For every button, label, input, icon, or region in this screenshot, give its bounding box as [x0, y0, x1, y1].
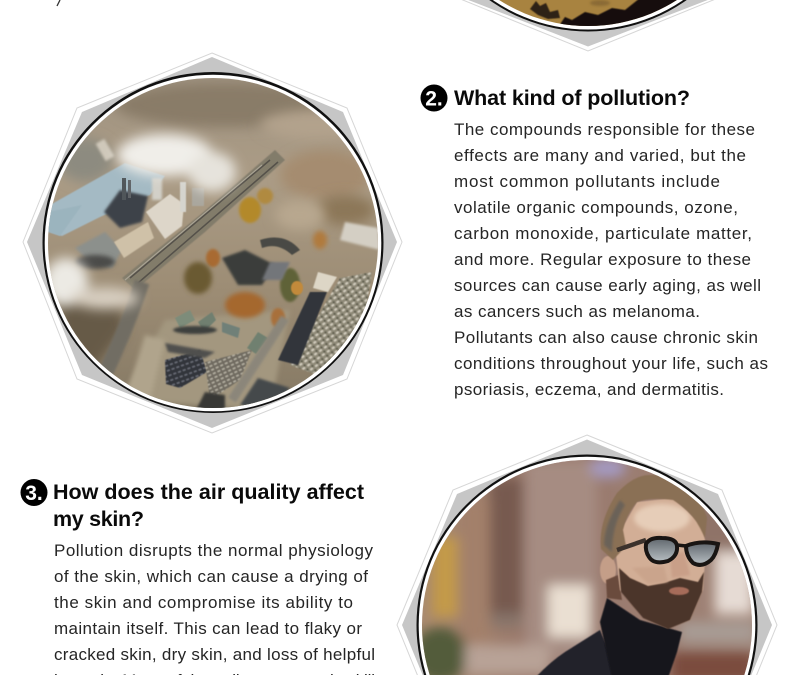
white ring [45, 75, 381, 411]
neck shadow [606, 575, 622, 600]
section 2 body text: most common pollutants include [454, 172, 720, 191]
section 2 body text: volatile organic compounds, ozone, [454, 198, 738, 217]
right brown field [280, 150, 370, 200]
small green roofs [175, 310, 195, 328]
octagon frame [397, 435, 777, 675]
section 2 body text: effects are many and varied, but the [454, 146, 746, 165]
number badge 3 [20, 479, 48, 506]
section 3 body text: of the skin, which can cause a drying of [54, 567, 368, 586]
section 2 body text: conditions throughout your life, such as [454, 354, 768, 373]
left yard [57, 138, 113, 182]
lower ground [120, 310, 290, 410]
white smoke [44, 134, 236, 309]
white main building [146, 194, 184, 239]
section 2 body text: and more. Regular exposure to these [454, 250, 751, 269]
forehead highlight [634, 504, 690, 532]
lips [669, 587, 689, 595]
turtleneck [600, 598, 682, 675]
blurred backdrop [412, 458, 755, 675]
heading text: What kind of pollution? [454, 86, 690, 110]
photo: factory and smoke [44, 75, 381, 412]
gray octagon fill [402, 440, 772, 675]
curved road [106, 282, 142, 372]
section 3 body text: Pollution disrupts the normal physiology [54, 541, 374, 560]
octagon frame [23, 53, 402, 433]
factory shed roof [50, 163, 165, 236]
bottom dark building [239, 376, 290, 406]
pale roof right [340, 222, 380, 250]
image frame: industrial aerial photo [23, 53, 402, 433]
section 3 heading [20, 479, 364, 531]
section 2 body text: carbon monoxide, particulate matter, [454, 224, 752, 243]
section 3 heading: my skin? [53, 507, 144, 531]
car lot [165, 350, 207, 388]
section 2 body text: psoriasis, eczema, and dermatitis. [454, 380, 724, 399]
section 3 body text [54, 541, 375, 675]
section 2 body text [454, 120, 768, 399]
heading text: How does the air quality affect [53, 480, 364, 504]
photo: dusk treeline [499, 0, 677, 26]
section 2 body text: sources can cause early aging, as well [454, 276, 761, 295]
section 3 body text: cracked skin, dry skin, and loss of helpful [54, 645, 375, 664]
machinery [104, 190, 148, 228]
photo: man in glasses [412, 458, 755, 675]
section 2 body text: Pollutants can also cause chronic skin [454, 328, 758, 347]
dark strip [278, 292, 327, 365]
orange trees [239, 197, 261, 223]
glasses [617, 538, 718, 565]
black ring [42, 72, 384, 413]
section 2 body text: as cancers such as melanoma. [454, 302, 700, 321]
image frame: portrait photo [397, 435, 777, 675]
number badge 2: 2. [425, 88, 443, 110]
section 2 body text: The compounds responsible for these [454, 120, 755, 139]
grey road [232, 318, 285, 400]
nose [671, 552, 689, 578]
white ring [420, 0, 756, 30]
ear [600, 556, 616, 584]
number badge 2 [420, 84, 448, 112]
jacket body [537, 630, 612, 675]
octagon frame [453, 0, 723, 51]
face [616, 498, 706, 628]
beard [619, 568, 704, 629]
gray octagon fill [27, 57, 397, 428]
pale speckled lot [290, 272, 372, 378]
clipped text fragment at top of page [57, 0, 60, 6]
image frame: clipped top photo [462, 0, 714, 52]
gray octagon fill [458, 0, 718, 46]
section 3 body text: the skin and compromise its ability to [54, 593, 353, 612]
hair [601, 475, 707, 560]
white ring [419, 457, 755, 675]
cheek under moustache [636, 568, 669, 585]
hazy forest band [115, 83, 335, 127]
rail corridor [122, 150, 285, 290]
number badge 3: 3. [25, 482, 43, 505]
black ring [416, 454, 758, 675]
section 3 body text: maintain itself. This can lead to flaky or [54, 619, 362, 638]
dark central plant [222, 250, 275, 285]
section 2 heading [420, 84, 690, 112]
black ring [418, 0, 758, 32]
